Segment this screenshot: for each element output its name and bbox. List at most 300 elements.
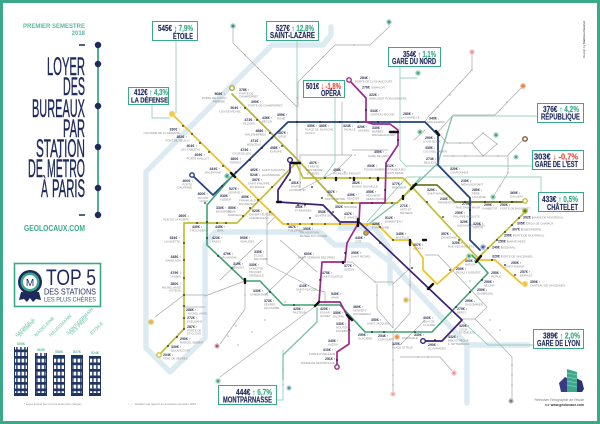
station labels: north centre: POISSONNIÈRE (364, 166, 385, 172)
station labels: north centre: PLACE DE (305, 128, 319, 132)
station labels: west: MICHEL ANGE (162, 286, 181, 290)
station labels: east: 250€ ↓ (477, 288, 488, 292)
station labels: east: 307€ ↑ (512, 228, 523, 232)
station labels: east (372, 112, 565, 350)
station labels: north centre: 420€ ↑ (357, 125, 368, 129)
station labels: north centre: 503€ ↑ (318, 210, 329, 214)
station labels: east: 360€ ↓ (510, 191, 521, 195)
chart: top 5 buildings: ÉTOILE (88, 319, 104, 336)
station labels: west: 260€ ↓ (178, 214, 189, 218)
station labels: east: 290€ ↓ (465, 299, 476, 303)
station labels: south: MARCEL SEMBAT (180, 340, 204, 344)
station labels: north centre: 390€ ↑ (251, 100, 262, 104)
station labels: south: MILITAIRE (254, 257, 268, 261)
station labels: north centre: ROOSEVELT (239, 202, 256, 206)
station labels: north centre (190, 76, 413, 244)
station labels: west: PEREIRE (213, 100, 225, 104)
station labels: west: PORTE DE CLICHY (202, 96, 227, 100)
station labels: east: PORTE DE BAGNOLET (500, 206, 531, 210)
station labels: north centre: HAVRE (291, 184, 301, 188)
station labels: north centre: RUE (327, 194, 333, 198)
station labels: east: BASTILLE (396, 236, 409, 240)
station labels: north centre: CLICHY (305, 131, 315, 135)
station labels: east: 320€ ↓ (427, 188, 438, 192)
callout: Montparnasse: MONTPARNASSE (223, 396, 272, 404)
station labels: east: 250€ ↑ (491, 271, 502, 275)
station labels: east: PARMENTIER (438, 200, 456, 204)
station labels: west: PORTE MAILLOT (187, 156, 209, 160)
station labels: east: AVRON (473, 226, 483, 230)
station labels: east: 300€ ↑ (423, 316, 434, 320)
station labels: north centre: 407€ ↑ (327, 190, 338, 194)
station labels: west: 382€ ↑ (176, 135, 187, 139)
station labels: north centre: 284€ ↑ (360, 76, 371, 80)
station labels: east: OLYMPIADES (428, 346, 446, 350)
station labels: north centre: BARBÈS (372, 128, 383, 134)
station labels: east: 320€ ↑ (492, 254, 503, 258)
callout: Gare du Nord: GARE DU NORD (392, 57, 436, 66)
chart: top 5 buildings (14, 307, 104, 396)
subtitle: premier semestre: PREMIER SEMESTRE (23, 24, 85, 30)
website name: GEOLOCAUX.COM (24, 224, 85, 233)
station labels: west: COURCELLES (232, 152, 251, 156)
station labels: south: ROCHEREAU (353, 312, 371, 316)
station labels: north centre: MUSÉE DU LOUVRE (300, 233, 327, 238)
station labels: west: 473€ ↑ (244, 118, 255, 122)
panel: top 5 heading (14, 264, 100, 306)
terminal stations (149, 20, 527, 403)
station labels: north centre: 436€ ↑ (262, 116, 273, 120)
station labels: east: STALINGRAD (427, 120, 445, 124)
station labels: east: 274€ ↓ (426, 157, 437, 161)
station labels: east: CHARONNE (441, 236, 457, 240)
station labels: south: 251€ ↑ (325, 357, 336, 361)
station labels: west: VILLIERS (243, 122, 255, 126)
station labels: north centre: MONTMARTRE (325, 197, 345, 201)
station labels: west: LA MUETTE (164, 240, 180, 244)
callout: Étoile: ÉTOILE (173, 32, 193, 41)
chart: top 5 buildings: 524€ (91, 351, 99, 355)
callout: Opéra: OPÉRA (321, 89, 341, 98)
Seine river (146, 27, 528, 403)
station labels: south: PORTE D'ORLÉANS (309, 351, 335, 356)
station labels: north centre: ANVERS (358, 128, 370, 132)
station labels: east: BUZENVAL (501, 246, 516, 250)
station labels: west: 330€ ↑ (169, 128, 180, 132)
station labels: east: 320€ ↑ (450, 167, 461, 171)
station labels: east: GAMBETTA (482, 206, 497, 210)
station labels: east: 250€ ↓ (500, 203, 511, 207)
station labels: north centre: 324€ ↓ (343, 124, 354, 128)
station labels: east: QUAI DE (423, 320, 435, 324)
station labels: east: LA CHAPELLE (401, 116, 420, 120)
chart: top 5 buildings: DES PRÉS (68, 315, 89, 336)
station labels: south (163, 236, 413, 365)
station labels: north centre: 512€ ↑ (386, 164, 397, 168)
title with metro-line motif (28, 45, 98, 215)
station labels: south: DUVERNET (336, 329, 352, 333)
station labels: north centre: 352€ ↑ (335, 205, 346, 209)
station labels: east: CHÂTEAU DE VINCENNES (530, 282, 565, 288)
station labels: west: 400€ ↓ (182, 179, 193, 183)
station labels: south: ÉCOLE (254, 252, 264, 258)
station labels: south: GRENELLE (249, 274, 264, 278)
station labels: north centre: SAINT PHILIPPE (248, 182, 270, 186)
station labels: north centre: 330€ ↑ (216, 206, 227, 210)
station labels: north centre: D'ESTIENNE (306, 168, 323, 172)
station labels: east: 320€ ↑ (452, 241, 463, 245)
station labels: north centre: 394€ ↑ (367, 164, 378, 168)
callout: Gare de l'Est: GARE DE L'EST (535, 160, 578, 169)
station labels: south: QUINET (320, 314, 331, 318)
chart: top 5 buildings: GEORGE V (14, 317, 35, 338)
station labels: south: EXELMANS (187, 320, 202, 324)
metro lines: light teal (283, 117, 452, 380)
station labels: north centre: 334€ ↑ (370, 109, 381, 113)
station labels: north centre: 378€ ↑ (239, 88, 250, 92)
station labels: east: 350€ ↑ (530, 280, 541, 284)
station labels: north centre: CHAMPERRET (239, 94, 259, 98)
station labels: north centre: ROME (277, 116, 286, 120)
station labels: east: LEDRU (413, 246, 422, 250)
station labels: north centre: PIGALLE (344, 128, 356, 132)
station labels: north centre: STRASBOURG (386, 168, 406, 172)
station labels: east: 335€ ↓ (425, 146, 436, 150)
station labels: north centre: É. MARCEL (344, 214, 360, 220)
station labels: north centre: 380€ ↑ (319, 124, 330, 128)
panel: top 5 heading: DES STATIONS (44, 286, 96, 296)
station labels: north centre: 523€ ↑ (252, 209, 263, 213)
station labels: south: SAINT JACQUES (367, 322, 389, 326)
metro line: green 6 (207, 175, 488, 332)
title with metro-line motif: MÉTRO (47, 154, 85, 183)
thin grey metro lines (155, 22, 525, 400)
station labels: north centre: TROCADÉRO (190, 228, 209, 232)
station labels: north centre: 397€ ↑ (252, 178, 263, 182)
station labels: north centre: PORTE DE CHAMPERRET (248, 104, 283, 108)
station labels: north centre: IÉNA (217, 228, 224, 232)
station labels: west: MONCEAU (247, 142, 261, 146)
station labels: north centre: MARCADET POISSONNIERS (369, 96, 407, 100)
station labels: east: LOUIS BLANC (423, 140, 442, 144)
station labels: west: 348€ ↑ (170, 255, 181, 259)
station labels: south: 286€ ↑ (186, 308, 197, 312)
station labels: south: CITÉ (355, 238, 362, 244)
station labels: east: PORTE DE MONTREUIL (513, 234, 545, 238)
station labels: east: 357€ ↑ (441, 232, 452, 236)
chart: top 5 buildings: HAUSSMANN (48, 313, 72, 338)
callout: République: RÉPUBLIQUE (541, 112, 580, 122)
title with metro-line motif: DES (63, 73, 85, 101)
station labels: east: NATION (465, 262, 475, 266)
station labels: west: 334€ ↑ (169, 236, 180, 240)
chart: top 5 buildings: MADELEINE (33, 315, 55, 338)
callout: Gare de Lyon: 389€ ↑ 2,0% (543, 332, 580, 340)
station labels: south: PLACE D'ITALIE (392, 346, 413, 350)
title with metro-line motif: À (41, 174, 48, 203)
callout: Gare de l'Est (532, 150, 584, 170)
station labels: south: 250€ ↑ (358, 333, 369, 337)
station labels: north centre: 527€ ↑ (229, 187, 240, 191)
station labels: south: SAINT-PLACIDE (296, 288, 317, 292)
metro line: olive 3 (232, 94, 413, 203)
station labels: east: DUGOMMIER (465, 302, 483, 306)
station labels: north centre: 550€ ↑ (228, 206, 239, 210)
station labels: north centre: 409€ ↑ (241, 195, 252, 199)
station labels: north centre: 408€ ↑ (333, 168, 344, 172)
station labels: east: 250€ ↑ (455, 211, 466, 215)
station labels: north centre: CHÂTEAU ROUGE (370, 112, 395, 116)
station labels: north centre: EUROPE (270, 150, 282, 154)
station labels: south: DENFERT (353, 308, 366, 312)
station labels: east: 250€ ↑ (456, 267, 467, 271)
station labels: east: 345€ ↑ (396, 232, 407, 236)
callout: Gare de Lyon: GARE DE LYON (537, 339, 580, 348)
station labels: north centre: PORTE DE (239, 92, 253, 96)
station labels: south: 350€ ↑ (351, 251, 362, 255)
station labels: east: BIBLIOTHÈQUE (448, 338, 469, 342)
station labels: north centre: RAMBUTEAU (385, 220, 403, 224)
station labels: west: 404€ ↑ (186, 144, 197, 148)
station labels: south: 420€ ↑ (293, 307, 304, 311)
station labels: east: 290€ ↑ (504, 234, 515, 238)
station labels: east: PHILIPPE AUGUSTE (453, 214, 480, 218)
callout: Châtelet: CHÂTELET (547, 203, 578, 212)
station labels: south: 330€ ↑ (253, 289, 264, 293)
station labels: south: VAVIN (331, 296, 339, 300)
station labels: east: 299€ ↓ (484, 203, 495, 207)
station dots (168, 108, 519, 360)
callout: Châtelet: 433€ ↑ 0,5% (542, 195, 578, 204)
station labels: east: BÉRAULT (520, 272, 533, 278)
chart: top 5 buildings: SAINT-GERMAIN (65, 307, 94, 336)
metro line: magenta 4 (319, 80, 398, 367)
station labels: north centre: SIMPLON (372, 86, 385, 90)
callout: Étoile (152, 22, 198, 41)
station labels: north centre: FRANKLIN D. (239, 198, 257, 202)
station labels: north centre: BOISSIÈRE (216, 208, 231, 214)
callout: Opéra (304, 80, 344, 98)
station labels: north centre: SÉBASTOPOL (366, 196, 385, 201)
station labels: east: REUILLY DIDEROT (456, 270, 481, 274)
title with metro-line motif: PAR (63, 115, 85, 143)
station labels: north centre: 350€ ↑ (366, 190, 377, 194)
station labels: west: RANELAGH (166, 258, 181, 262)
station labels: north centre: D'ORVES (307, 172, 319, 176)
title with metro-line motif: DE (28, 155, 43, 183)
station labels: north centre: 462€ ↑ (250, 168, 261, 172)
station labels: south: 475€ ↑ (322, 271, 333, 275)
metro line: dark olive 5 (413, 185, 525, 202)
callout: Montparnasse (218, 386, 276, 404)
callout: La Défense: 412€ ↑ 4,3% (134, 88, 168, 97)
station labels: east: RUE SAINT-MAUR (456, 206, 480, 210)
station labels: east: 280€ ↑ (403, 112, 414, 116)
station labels: west: COLONNE DE LA DÉFENSE (143, 130, 180, 135)
station labels: south: 335€ ↑ (254, 250, 265, 254)
station labels: north centre: MARCEAU (228, 213, 242, 217)
subtitle: premier semestre (23, 24, 86, 37)
station labels: south: PASTEUR (293, 310, 306, 314)
station labels: west: VICTOR (197, 196, 208, 200)
station labels: north centre: ALMA (228, 210, 236, 214)
station labels: east: 290€ ↑ (428, 343, 439, 347)
station labels: south: BILLANCOURT (171, 348, 191, 352)
station labels: north centre: GEORGE V (228, 190, 243, 194)
station labels: north centre: 530€ ↑ (220, 194, 231, 198)
station labels: north centre: 407€ ↑ (309, 161, 320, 165)
station labels: north centre: 322€ ↑ (369, 93, 380, 97)
station labels: west: AUTEUIL (169, 288, 181, 292)
station labels: west: DAUPHINE (178, 186, 192, 190)
callout: Gare de l'Est: 303€ ↓ -0,7% (534, 152, 578, 162)
station labels: north centre: CAUMARTIN (289, 188, 306, 192)
station labels: east: BERCY (457, 310, 467, 314)
station labels: east: 407€ ↑ (413, 243, 424, 247)
station labels: west: LES SABLONS (181, 148, 200, 152)
callout: Gare du Nord: 354€ ↑ 1,1% (403, 50, 436, 59)
station labels: south: 272€ ↑ (187, 316, 198, 320)
station labels: east: LA GARE (423, 323, 435, 327)
station labels: south: SAINT MICHEL (351, 254, 371, 258)
station labels: north centre: BLANCHE (320, 128, 333, 132)
station labels: south: MICHEL ANGE (188, 312, 207, 316)
station labels: south: CORVISART (378, 338, 395, 342)
station labels: south: 204€ ↑ (163, 353, 174, 357)
station labels: east: 250€ ↑ (498, 240, 509, 244)
station labels: south: LECOURBE (264, 306, 280, 310)
station labels: east: MÉNILMONTANT (461, 182, 483, 186)
station labels: north centre: 439€ ↑ (347, 193, 358, 197)
station labels: north centre: PASSY (212, 240, 221, 244)
station labels: east: DAUMESNIL (477, 292, 494, 296)
station labels: north centre: 399€ ↑ (277, 113, 288, 117)
station labels: south: 377€ ↑ (344, 264, 355, 268)
station labels: east: BEL AIR (484, 284, 494, 288)
station labels: south: PORTE DE (187, 328, 201, 332)
station labels: east: 270€ ↓ (462, 202, 473, 206)
station labels: south: RASPAIL (333, 314, 345, 318)
panel: top 5 heading: TOP 5 (46, 265, 96, 290)
station labels: south: EDGAR (320, 310, 330, 314)
station labels: east: COLONEL FABIEN (423, 150, 447, 154)
metro line: navy 2 (192, 122, 480, 250)
station labels: east: 257€ ↑ (520, 270, 531, 274)
station labels: north centre: ROCHECHOUART (372, 133, 396, 137)
station labels: west: 444€ ↑ (209, 167, 220, 171)
station labels: south: PONT DE SÈVRES (163, 356, 188, 360)
callout: Châtelet (538, 192, 584, 212)
station labels: south: 254€ ↑ (378, 334, 389, 338)
station labels: north centre: 524€ ↓ (250, 173, 261, 177)
station labels: east: COURONNES (450, 170, 468, 174)
station labels: east: LACHAISE (472, 195, 486, 199)
station labels: north centre: 350€ ↑ (307, 124, 318, 128)
station labels: north centre: 362€ ↑ (352, 181, 363, 185)
station labels: west: 504€ ↑ (230, 106, 241, 110)
station labels: west: TERNES (230, 160, 241, 164)
station labels: south: ST-CLOUD (187, 332, 201, 336)
callout: Gare du Nord (388, 48, 440, 66)
subtitle: premier semestre: 2018 (72, 31, 86, 37)
callout: République: 376€ ↑ 4,2% (543, 105, 579, 114)
station labels: north centre: DU ROULE (250, 185, 265, 189)
station labels: south: 287€ ↑ (187, 325, 198, 329)
station labels: north centre: BÉCON (262, 118, 272, 124)
station labels: east: SAINT-MANDÉ (505, 264, 524, 268)
station labels: east: ST-ÉMILION (459, 330, 475, 334)
station labels: west: 400€ ↑ (197, 192, 208, 196)
station labels: south: INVALIDES (240, 240, 255, 244)
callout: La Défense (128, 88, 168, 104)
title with metro-line motif: PARIS (52, 175, 85, 203)
callout: Montparnasse: 444€ ↑ 6,7% (236, 388, 272, 397)
station labels: east: 250€ ↑ (511, 261, 522, 265)
station labels: north centre: 387€ ↑ (278, 131, 289, 135)
interchange bars (231, 131, 481, 320)
callout: Opéra: 501€ ↓ -1,8% (306, 82, 341, 91)
station labels: south: 319€ ↑ (233, 262, 244, 266)
callout: Saint-Lazare: 527€ ↑ 12,8% (276, 24, 314, 33)
station labels: west: MALESHERBES (245, 132, 266, 136)
station labels: north centre: 330€ ↑ (372, 126, 383, 130)
footnote: variation: ↑, ↓ : Variation par rapport au deuxième semestre 2016 (128, 402, 196, 406)
callout: République (538, 104, 584, 122)
station labels: north centre: RÉAUMUR (366, 192, 380, 198)
station labels: north centre: ARTS ET (400, 208, 412, 212)
station labels: west: JASMIN (171, 274, 181, 278)
station labels: south: 500€ ↑ (240, 236, 251, 240)
station labels: north centre: SAINT AUGUSTIN (262, 168, 285, 172)
station labels: north centre: 350€ ↑ (303, 227, 314, 231)
station labels: south: 320€ ↑ (392, 342, 403, 346)
station labels: north centre: 430€ ↑ (192, 225, 203, 229)
metro line: olive 9 (159, 163, 525, 355)
station labels: north centre: 350€ ↑ (374, 150, 385, 154)
station labels: north centre: GARE DE L'EST (368, 154, 389, 158)
station labels: west: LOUISE MICHEL (219, 110, 241, 114)
metro line: yellow 1 (172, 114, 522, 284)
station labels: north centre: 271€ ↑ (400, 204, 411, 208)
chart: top 5 buildings: 560€ (37, 348, 45, 352)
station labels: west: 479€ ↑ (170, 271, 181, 275)
station labels: north centre: 451€ ↑ (291, 181, 302, 185)
station labels: east: F. MITTERRAND (448, 342, 469, 346)
thin callout leader lines (152, 40, 541, 400)
station labels: west: RUE DE LA POMPE (164, 218, 189, 222)
callout: Gare de Lyon (534, 330, 584, 348)
closing credit text: Retrouver l'infographie de l'étude (534, 398, 584, 402)
station labels: east: RUE DES BOULETS (448, 244, 474, 248)
station labels: south: 440€ ↑ (355, 236, 366, 240)
station labels: south: 410€ ↑ (299, 284, 310, 288)
station labels: north centre: BONNE NOUVELLE (352, 184, 378, 188)
chart: top 5 buildings: 600€ (17, 342, 25, 346)
station labels: north centre: 276€ ↑ (362, 86, 373, 90)
station labels: east: GALLIENI (510, 194, 523, 198)
station labels: east: 330€ ↑ (414, 333, 425, 337)
station labels: east: 270€ ↑ (457, 307, 468, 311)
station labels: east: SAINT-MAUR (427, 192, 444, 196)
callout: Saint-Lazare (266, 22, 318, 40)
station labels: south: CAMBRONNE (250, 292, 268, 296)
station labels: east: 280€ ↓ (472, 188, 483, 192)
station labels: north centre: CHAMPS ÉLYSÉES (249, 212, 274, 216)
station labels: east: MAIRIE DE MONTREUIL (532, 216, 564, 220)
station labels: east: 420€ ↑ (372, 222, 383, 226)
station labels: east: 329€ ↑ (460, 220, 471, 224)
station labels: south: PICQUET (249, 270, 262, 274)
